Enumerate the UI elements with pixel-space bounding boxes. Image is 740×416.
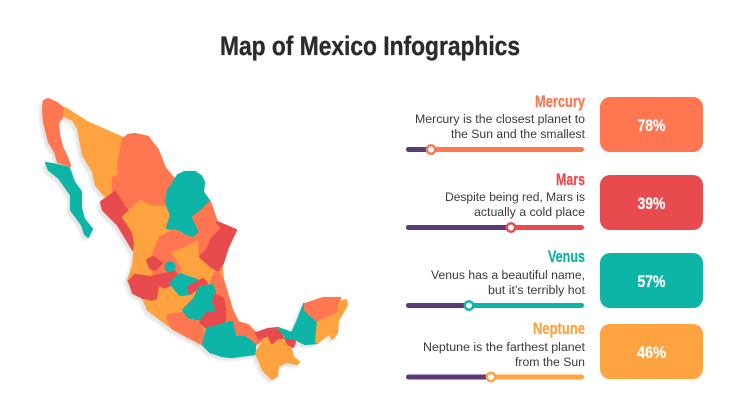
- row: Venus: [406, 248, 703, 310]
- row: Mars: [406, 171, 703, 232]
- heading: Neptune: Neptune: [533, 320, 585, 338]
- text: Mercury description: the Sun and the smallest: [451, 127, 586, 141]
- card: 39%: [600, 175, 703, 230]
- text: Venus description: but it’s terribly hot: [488, 283, 586, 297]
- slider: Venus: [406, 301, 584, 310]
- slider: Neptune: [406, 373, 584, 381]
- card: 39%: 39%: [638, 195, 666, 213]
- slider: Mercury: [406, 145, 584, 154]
- map of Mexico: [43, 99, 347, 379]
- text: Neptune description: Neptune is the farthest planet: [423, 340, 586, 354]
- row: Mercury: [406, 93, 703, 154]
- text: Mars description: actually a cold place: [474, 205, 585, 219]
- heading: Mercury: Mercury: [535, 93, 586, 111]
- text: Neptune description: [423, 340, 586, 369]
- row: Neptune: [406, 320, 703, 381]
- text: Venus description: Venus has a beautiful name,: [431, 268, 585, 282]
- card: 78%: [600, 97, 703, 152]
- card: 57%: [600, 253, 703, 308]
- slider: Mars: [406, 223, 584, 232]
- title: Map of Mexico Infographics: [220, 31, 520, 61]
- card: 78%: 78%: [638, 117, 666, 135]
- text: Neptune description: from the Sun: [515, 355, 585, 369]
- icon: small state: [165, 262, 175, 272]
- card: 46%: 46%: [637, 344, 666, 362]
- card: 57%: 57%: [638, 273, 666, 291]
- card: 46%: [600, 324, 703, 379]
- heading: Venus: Venus: [548, 248, 585, 266]
- text: Mars description: [445, 190, 585, 219]
- text: Mercury description: [415, 112, 586, 141]
- heading: Mars: Mars: [556, 171, 585, 189]
- text: Mercury description: Mercury is the closest planet to: [415, 112, 585, 126]
- text: Mars description: Despite being red, Mars is: [445, 190, 585, 204]
- text: Venus description: [431, 268, 586, 297]
